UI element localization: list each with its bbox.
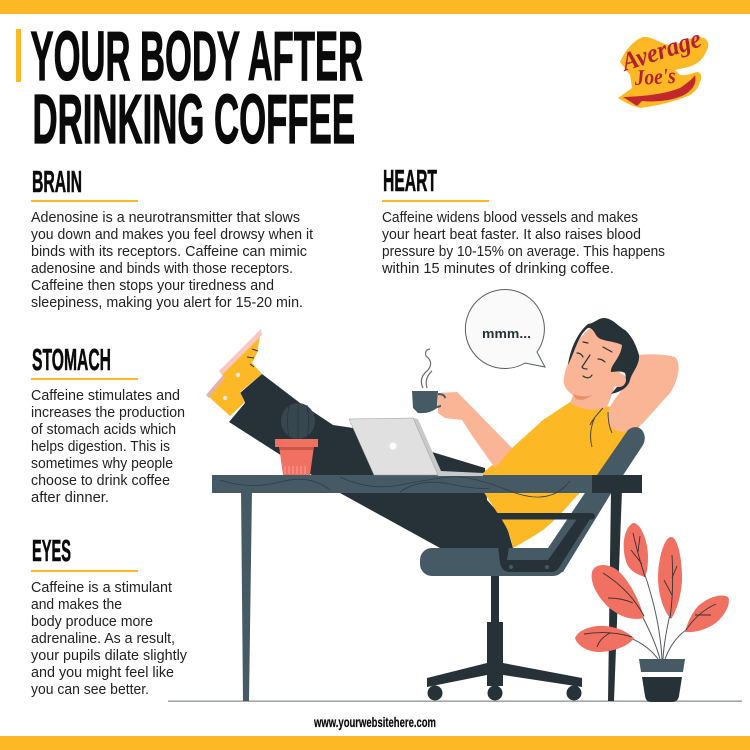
section: eyes: EYES (32, 533, 71, 568)
section: brain: sleepiness, making you alert for 15-20 min. (31, 295, 303, 311)
floor line (168, 700, 742, 702)
logo: Average Joe's (616, 24, 708, 108)
section: stomach: after dinner. (31, 490, 109, 506)
section: brain: binds with its receptors. Caffeine can mimic (31, 244, 307, 260)
man: head (564, 318, 639, 447)
section: brain: BRAIN (32, 164, 82, 199)
logo: Average Joe's: Joe's (633, 63, 676, 90)
section: heart: within 15 minutes of drinking coffee. (381, 261, 614, 277)
section: stomach (31, 342, 185, 506)
man: trousers (229, 374, 513, 548)
speech bubble: mmm... (482, 326, 531, 341)
section: heart: pressure by 10-15% on average. This happens (382, 244, 665, 260)
man: shirt (483, 402, 645, 548)
section: heart: Caffeine widens blood vessels and makes (382, 210, 638, 226)
desk right leg (608, 490, 622, 701)
section: brain: you down and makes you feel drowsy when it (31, 227, 313, 243)
title accent bar (16, 29, 21, 82)
section: stomach: Caffeine stimulates and (31, 388, 180, 404)
section: stomach: choose to drink coffee (31, 473, 170, 489)
man: coffee arm (438, 392, 512, 468)
laptop (349, 418, 483, 476)
man: raised arm (607, 354, 679, 432)
logo: Average Joe's: Average (616, 24, 705, 77)
section: heart (381, 163, 665, 277)
text: YOUR BODY AFTER (30, 17, 363, 95)
section: eyes: and you might feel like (31, 665, 174, 681)
bottom yellow band (0, 736, 750, 750)
section: eyes: body produce more (31, 614, 153, 630)
chair back (548, 427, 645, 572)
section: stomach: of stomach acids which (31, 422, 176, 438)
cactus in pot (275, 403, 318, 475)
top yellow band (0, 0, 750, 14)
section: brain: Caffeine then stops your tiredness and (31, 278, 274, 294)
section: heart: your heart beat faster. It also raises blood (382, 227, 641, 243)
section: brain: adenosine and binds with those receptors. (31, 261, 293, 277)
section: heart: HEART (383, 163, 437, 198)
plant (575, 523, 729, 702)
section: eyes: you can see better. (31, 682, 149, 698)
speech bubble (465, 290, 545, 369)
section: eyes: Caffeine is a stimulant (31, 580, 172, 596)
section: brain: Adenosine is a neurotransmitter that slows (31, 210, 300, 226)
desk (212, 475, 642, 701)
section: eyes: adrenaline. As a result, (31, 631, 175, 647)
section: stomach: helps digestion. This is (31, 439, 170, 455)
coffee cup with steam (412, 349, 458, 418)
office chair base and seat (420, 548, 582, 700)
website footer: www.yourwebsitehere.com (313, 714, 436, 730)
section: stomach: increases the production (31, 405, 185, 421)
section: eyes: your pupils dilate slightly (31, 648, 188, 664)
section: eyes (31, 533, 188, 698)
section: brain (31, 164, 313, 311)
title (30, 17, 363, 158)
section: eyes: and makes the (31, 597, 122, 613)
section: stomach: STOMACH (32, 342, 111, 377)
section: stomach: sometimes why people (31, 456, 173, 472)
title: DRINKING COFFEE (32, 80, 355, 158)
man: socks (206, 329, 262, 416)
armrest (468, 513, 595, 572)
